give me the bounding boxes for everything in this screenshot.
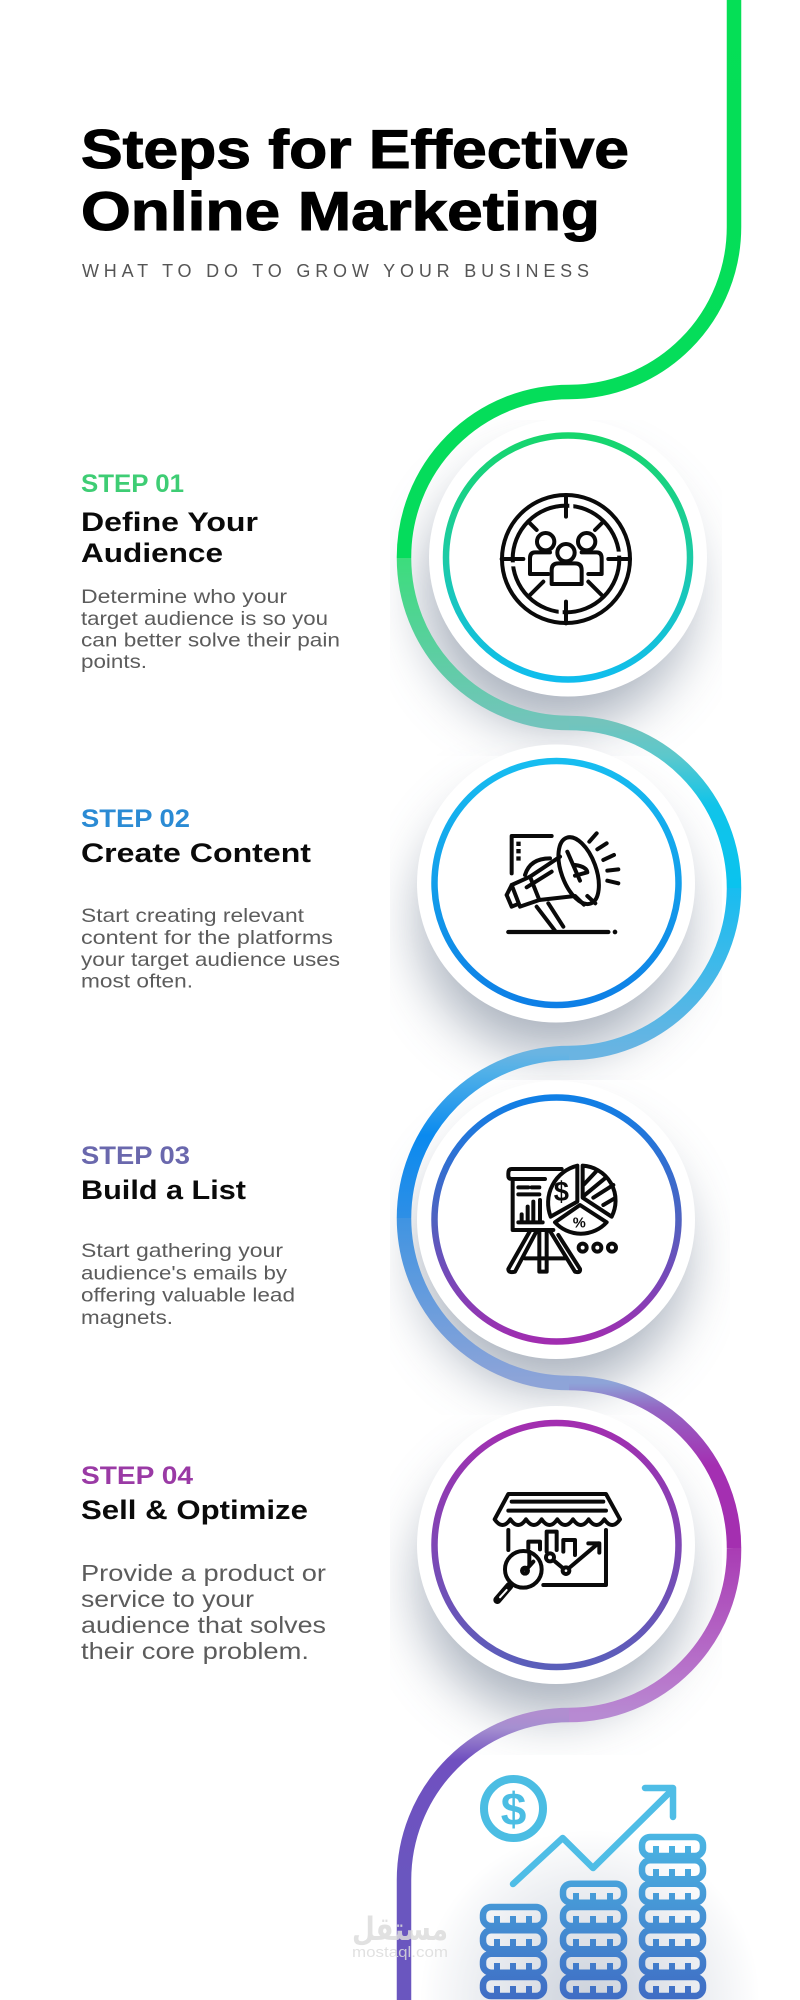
arrow: growth line — [513, 1788, 673, 1884]
step 03 text: audience's emails by — [81, 1262, 287, 1284]
step 02 text: content for the platforms — [81, 927, 333, 949]
card shadows — [420, 461, 691, 1715]
title — [81, 118, 629, 242]
step 03 text: offering valuable lead — [81, 1284, 295, 1306]
subtitle: WHAT TO DO TO GROW YOUR BUSINESS — [82, 261, 589, 281]
step 04 text: their core problem. — [81, 1638, 309, 1664]
step 01 text — [81, 470, 340, 673]
step 04 text: Sell & Optimize — [81, 1495, 308, 1525]
icon: megaphone — [507, 832, 618, 934]
panel: step 03 disc — [417, 1081, 695, 1359]
icon: presentation board with pie chart — [508, 1166, 616, 1272]
icon: audience target — [502, 495, 630, 623]
step 02 text: STEP 02 — [81, 805, 190, 833]
watermark: مستقل — [352, 1910, 448, 1948]
panel: step 02 disc — [417, 744, 695, 1022]
panel: step 01 disc — [429, 418, 707, 696]
title: Steps for Effective — [81, 118, 629, 180]
step 03 text: Start gathering your — [81, 1240, 284, 1262]
step 04 text: Provide a product or — [81, 1560, 326, 1586]
step 01 text: points. — [81, 651, 147, 673]
coin stacks — [483, 1837, 703, 1996]
step 01 text: STEP 01 — [81, 470, 184, 498]
watermark — [352, 1910, 448, 1961]
title: Online Marketing — [81, 180, 600, 242]
step 02 text — [81, 805, 340, 992]
step 02 text: Create Content — [81, 838, 311, 868]
winding gradient path — [404, 0, 734, 2000]
step 02 text: Start creating relevant — [81, 905, 305, 927]
icon: presentation board with pie chart: % — [573, 1216, 586, 1232]
step 02 text: most often. — [81, 970, 193, 992]
step 04 text — [81, 1462, 326, 1664]
step 01 text: Define Your — [81, 507, 259, 537]
panel: step 04 disc — [417, 1406, 695, 1684]
step 03 text — [81, 1142, 295, 1329]
step 04 text: audience that solves — [81, 1612, 326, 1638]
step 04 text: STEP 04 — [81, 1462, 193, 1490]
icon: presentation board with pie chart: $ — [554, 1176, 569, 1207]
step 01 text: target audience is so you — [81, 608, 328, 630]
step 01 text: can better solve their pain — [81, 630, 340, 652]
step 04 text: service to your — [81, 1586, 254, 1612]
step 03 text: magnets. — [81, 1307, 173, 1329]
illustration: dollar and growth coins — [483, 1779, 703, 1996]
icon: dollar coin: $ — [501, 1783, 526, 1835]
step 01 text: Audience — [81, 538, 223, 568]
icon: dollar coin — [484, 1779, 543, 1838]
icon: store with analytics — [495, 1494, 620, 1600]
watermark: mostaql.com — [352, 1944, 448, 1961]
step 03 text: STEP 03 — [81, 1142, 190, 1170]
step 01 text: Determine who your — [81, 586, 288, 608]
bottom shadow behind coins — [420, 1830, 760, 2000]
step 02 text: your target audience uses — [81, 949, 340, 971]
step 03 text: Build a List — [81, 1175, 246, 1205]
